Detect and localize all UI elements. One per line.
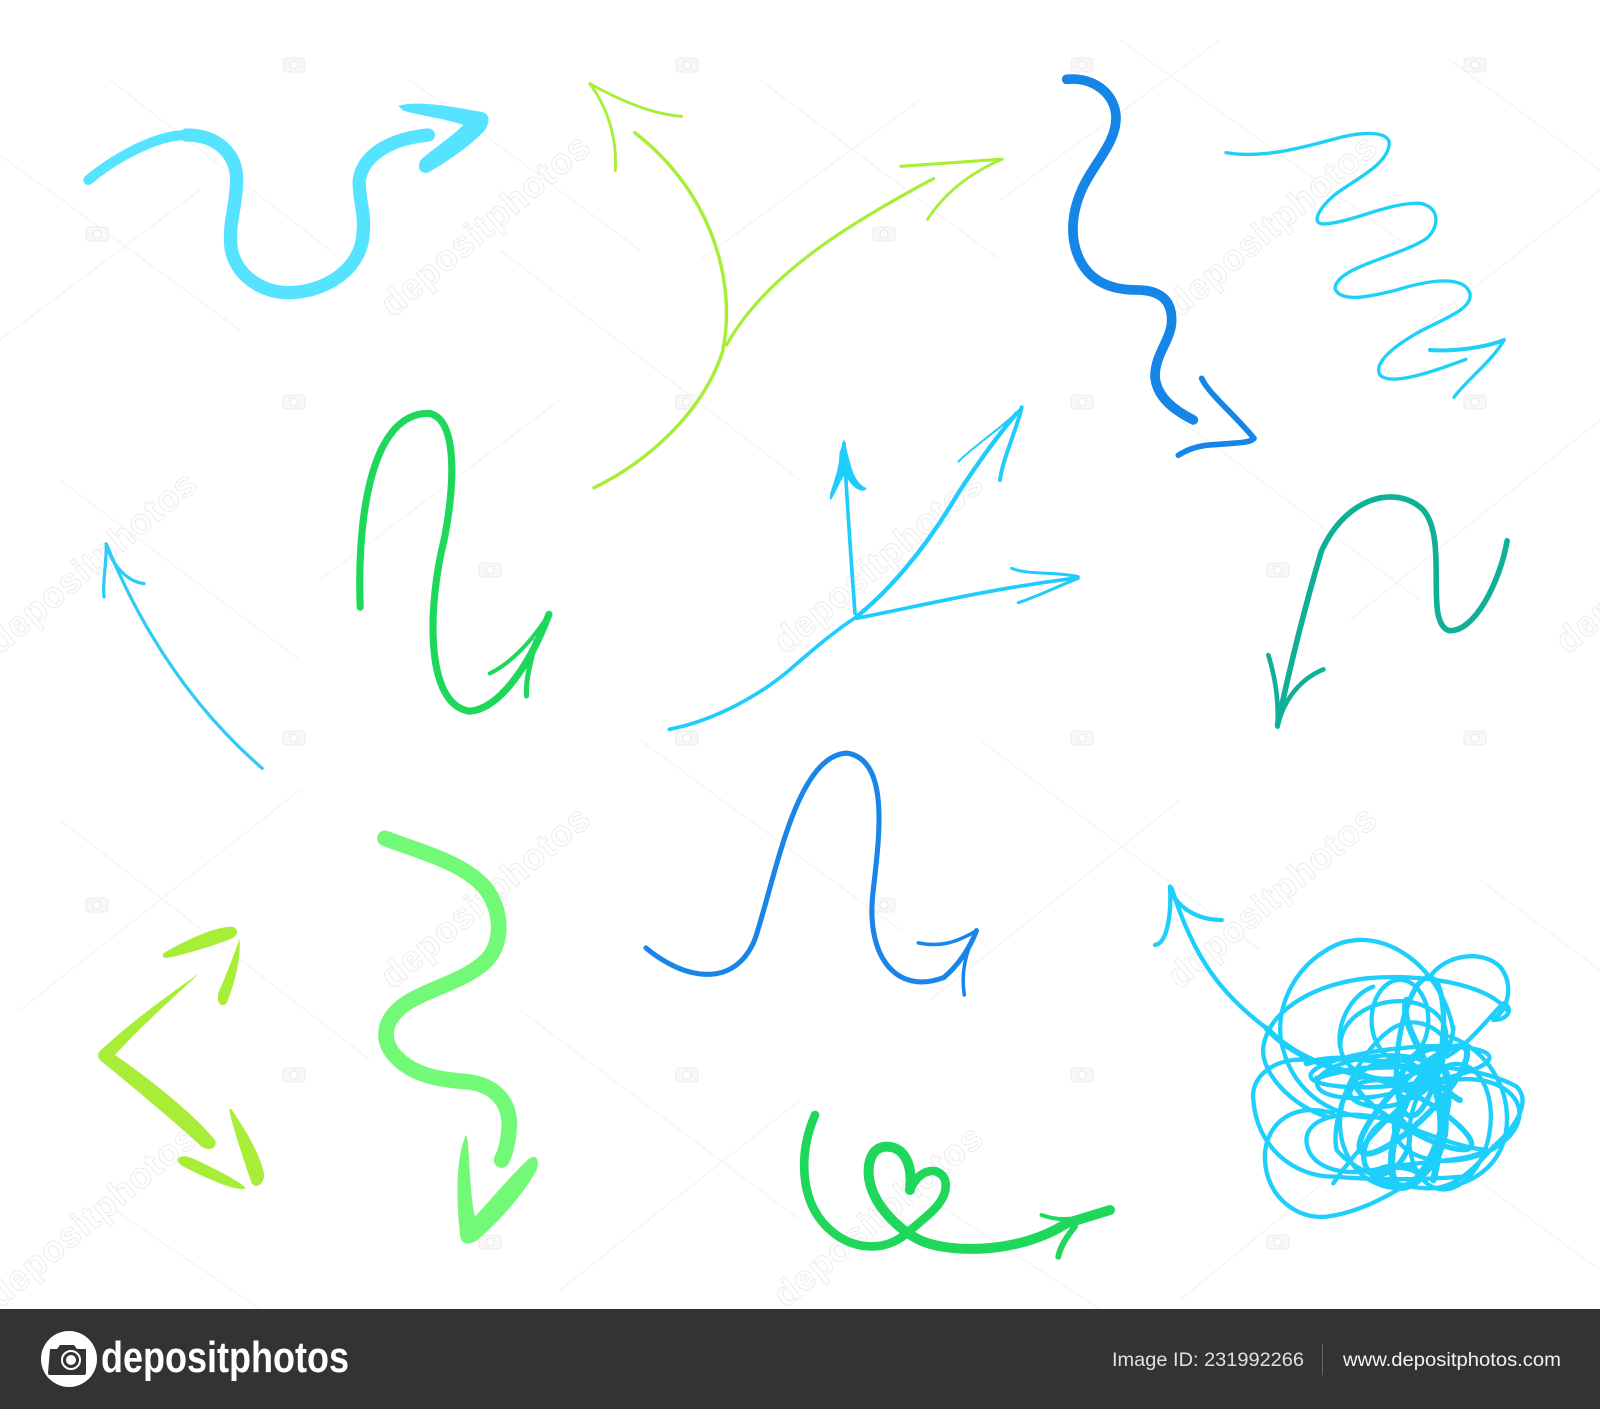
footer divider — [1322, 1344, 1323, 1375]
footer logo wordmark: depositphotos — [101, 1333, 349, 1382]
watermark pattern: depositphotos — [1159, 125, 1385, 324]
arrow: lime forked thin — [590, 84, 1002, 488]
watermark pattern: depositphotos — [765, 1116, 991, 1315]
arrow: lime chevron double head — [98, 927, 264, 1189]
watermark pattern: depositphotos — [1159, 797, 1385, 996]
arrow: green heart loop — [804, 1115, 1110, 1257]
footer website: www.depositphotos.com — [1342, 1349, 1561, 1371]
arrow: teal down arrow — [1268, 497, 1507, 727]
remaining hand-drawn arrows — [104, 84, 1507, 995]
watermark pattern: depositphotos — [372, 125, 598, 324]
arrow: thick light green wave — [385, 838, 538, 1244]
footer bar — [0, 1309, 1600, 1409]
arrow: blue bell curve — [646, 753, 977, 995]
arrow: light blue zigzag squiggle — [1226, 133, 1504, 397]
arrow: cyan three-branch tree — [669, 407, 1078, 729]
footer logo icon — [41, 1331, 97, 1387]
arrow: thick light blue wave — [88, 104, 489, 293]
watermark pattern: depositphotos — [765, 462, 991, 661]
arrow: thin cyan left curve — [104, 544, 262, 768]
arrow: green S curve — [360, 413, 549, 711]
arrow: cyan scribble tangle — [1155, 887, 1526, 1217]
arrow: blue wavy thick — [1067, 79, 1254, 455]
footer image id: Image ID: 231992266 — [1112, 1349, 1304, 1371]
watermark pattern: depositphotos — [372, 797, 598, 996]
